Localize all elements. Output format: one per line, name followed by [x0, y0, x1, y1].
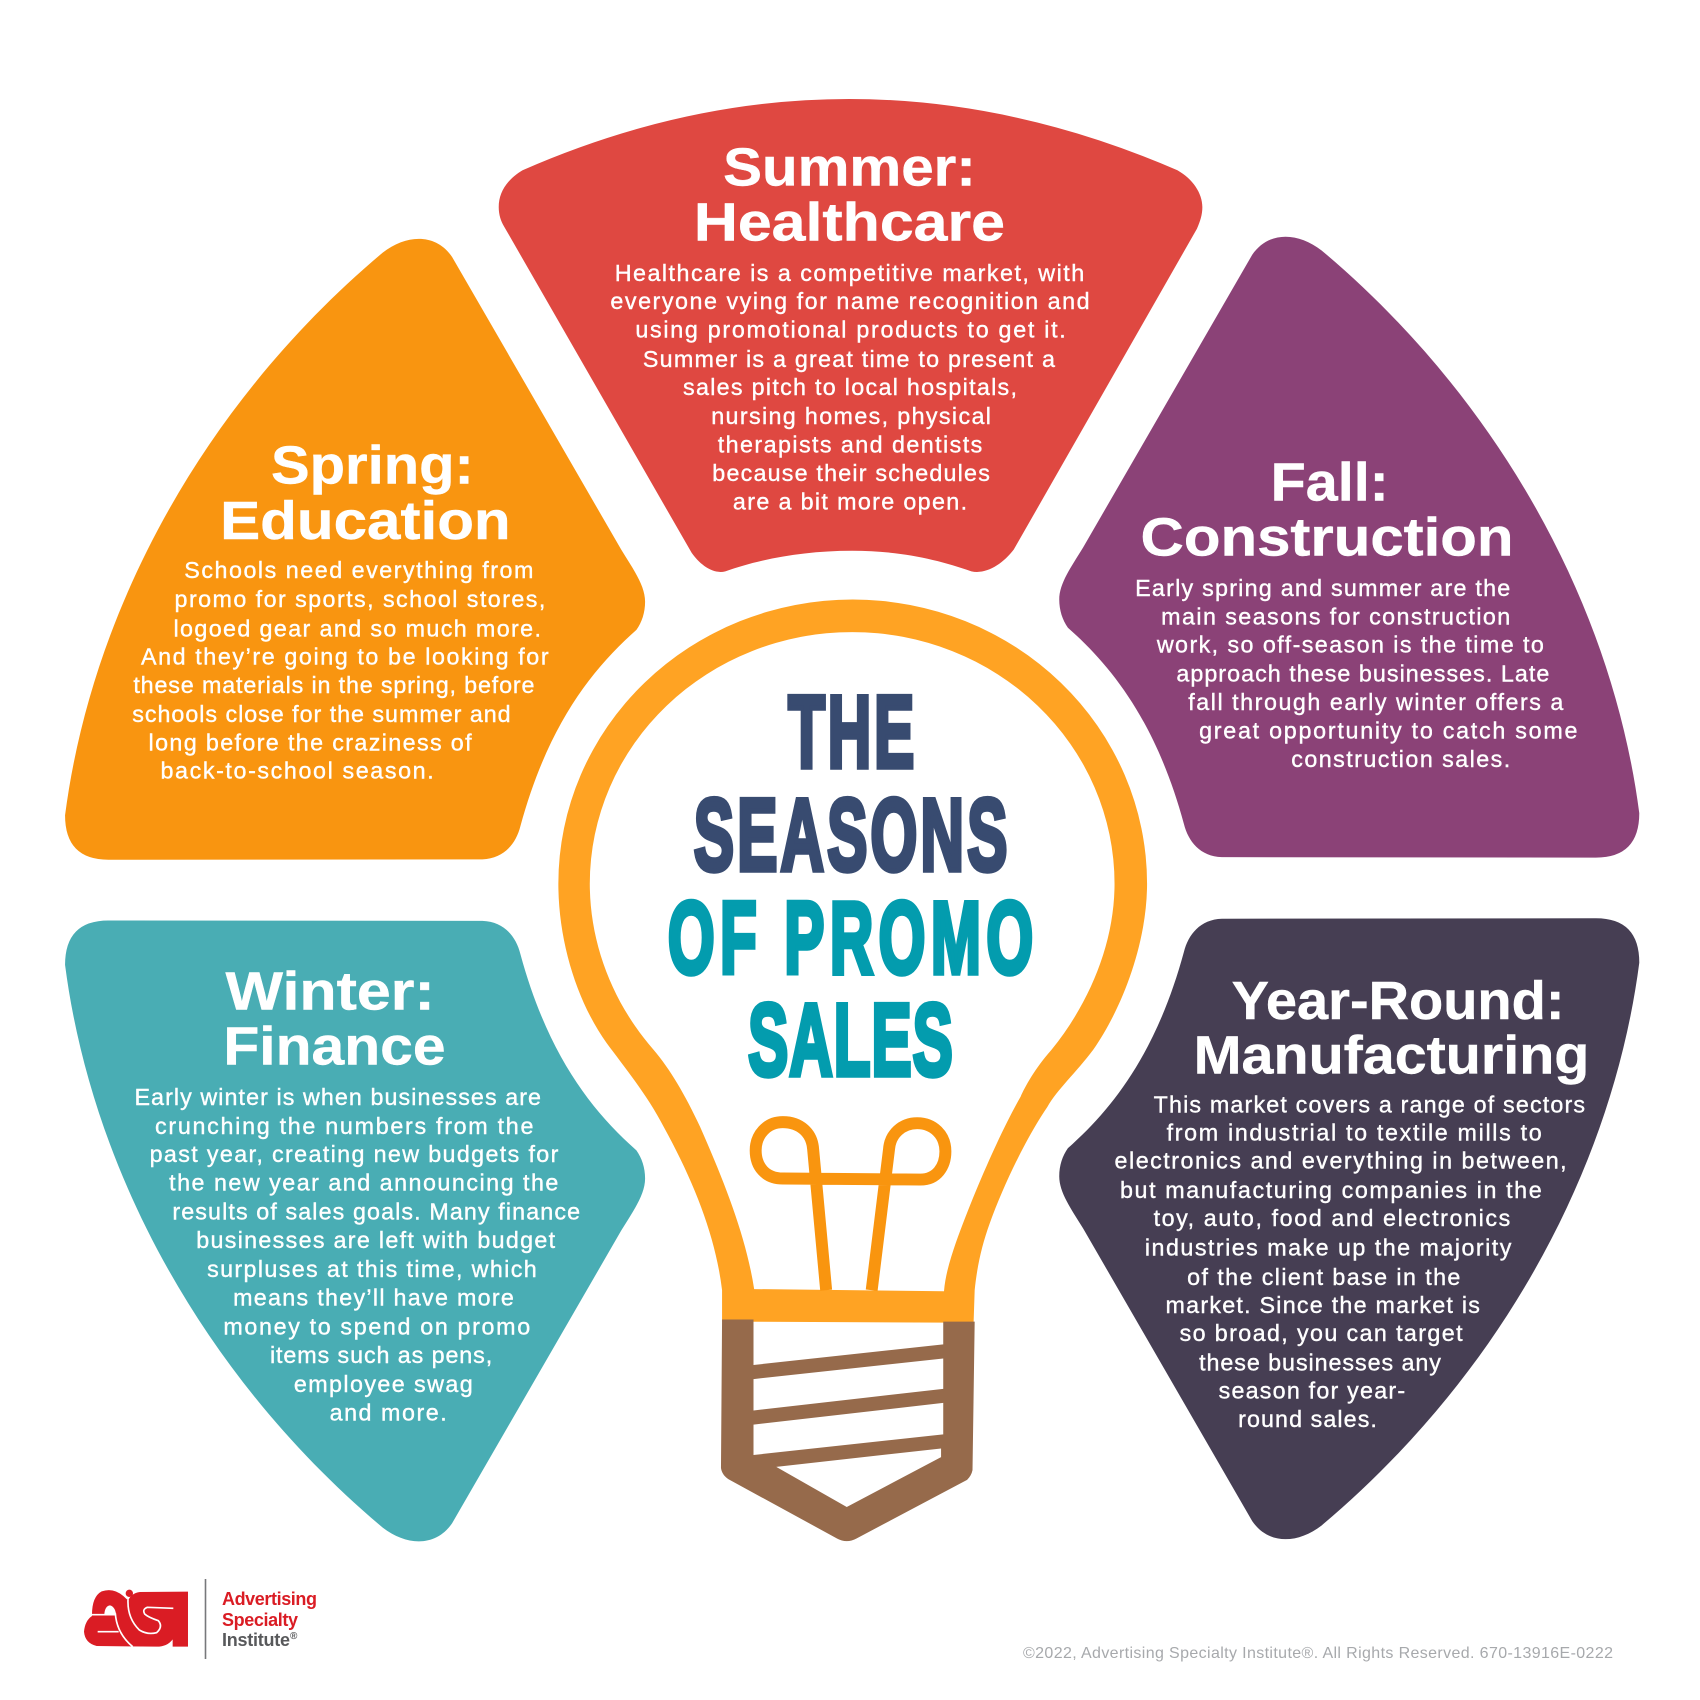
heading: fall construction: Construction — [1141, 508, 1514, 568]
heading: year-round manufacturing: Year-Round: — [1232, 971, 1564, 1031]
body text: winter: means they’ll have more — [233, 1284, 514, 1310]
heading: spring education: Education — [220, 491, 511, 551]
body text: winter: surpluses at this time, which — [207, 1256, 537, 1282]
body text: fall: great opportunity to catch some — [1199, 717, 1577, 743]
panel: summer healthcare — [499, 99, 1202, 572]
heading: winter finance — [223, 961, 446, 1077]
heading: summer healthcare: Summer: — [723, 137, 976, 197]
panel: fall construction — [1059, 237, 1639, 858]
bulb screw base — [721, 1319, 975, 1541]
body text: year-round: but manufacturing companies in the — [1120, 1177, 1542, 1203]
panel shape: spring — [65, 239, 645, 860]
body text: summer: are a bit more open. — [733, 489, 967, 515]
body text: year-round: round sales. — [1238, 1406, 1377, 1432]
body text: year-round — [1115, 1091, 1585, 1432]
body text: fall: construction sales. — [1291, 746, 1510, 772]
bulb glass outline — [558, 600, 1147, 1323]
body text: winter: businesses are left with budget — [196, 1227, 556, 1253]
heading: spring education: Spring: — [271, 436, 474, 496]
title: the seasons of promo sales — [668, 674, 1033, 1097]
body text: spring: Schools need everything from — [184, 557, 533, 583]
body text: year-round: these businesses any — [1199, 1349, 1441, 1375]
body text: year-round: toy, auto, food and electronics — [1154, 1205, 1510, 1231]
body text: spring: logoed gear and so much more. — [173, 615, 541, 641]
body text: fall — [1135, 575, 1577, 772]
body text: summer: Summer is a great time to present a — [643, 346, 1055, 372]
panel shape: fall — [1059, 237, 1639, 858]
logo wordmark: Specialty — [222, 1610, 298, 1630]
lightbulb illustration — [558, 600, 1147, 1541]
body text: spring: promo for sports, school stores, — [175, 586, 545, 612]
body text: spring: long before the craziness of — [149, 729, 472, 755]
panel shape: winter — [65, 920, 645, 1541]
body text: year-round: of the client base in the — [1187, 1264, 1460, 1290]
body text: winter: Early winter is when businesses are — [134, 1084, 541, 1110]
body text: spring: these materials in the spring, before — [133, 672, 535, 698]
body text: fall: approach these businesses. Late — [1176, 660, 1549, 686]
body text: year-round: This market covers a range of sectors — [1154, 1091, 1585, 1117]
heading: fall construction — [1141, 452, 1514, 568]
body text: winter: crunching the numbers from the — [155, 1113, 533, 1139]
body text: spring — [132, 557, 549, 783]
body text: summer: sales pitch to local hospitals, — [683, 374, 1017, 400]
body text: winter: results of sales goals. Many finance — [172, 1199, 580, 1225]
panel shape: summer — [499, 99, 1202, 572]
body text: summer — [610, 260, 1090, 515]
panel shape: year-round — [1059, 918, 1639, 1539]
body text: summer: using promotional products to get it. — [635, 317, 1066, 343]
body text: winter: past year, creating new budgets for — [150, 1141, 559, 1167]
body text: winter: and more. — [330, 1399, 447, 1425]
body text: winter: the new year and announcing the — [169, 1169, 558, 1195]
body text: spring: schools close for the summer and — [132, 701, 511, 727]
body text: fall: main seasons for construction — [1161, 603, 1510, 629]
body text: summer: because their schedules — [712, 460, 990, 486]
heading: summer healthcare: Healthcare — [694, 193, 1005, 253]
filament — [756, 1122, 945, 1290]
body text: winter: employee swag — [294, 1371, 473, 1397]
heading: summer healthcare — [694, 137, 1005, 253]
body text: year-round: market. Since the market is — [1165, 1292, 1480, 1318]
logo divider — [205, 1579, 206, 1659]
body text: summer: Healthcare is a competitive market, with — [615, 260, 1084, 286]
heading: winter finance: Winter: — [226, 961, 435, 1021]
body text: summer: everyone vying for name recognition and — [610, 288, 1090, 314]
logo wordmark: Institute — [222, 1630, 290, 1650]
logo mark: ASI — [84, 1590, 188, 1647]
body text: fall: fall through early winter offers a — [1188, 689, 1563, 715]
panel: winter finance — [65, 920, 645, 1541]
body text: year-round: so broad, you can target — [1180, 1320, 1463, 1346]
body text: year-round: from industrial to textile mills to — [1167, 1120, 1542, 1146]
body text: fall: Early spring and summer are the — [1135, 575, 1510, 601]
body text: year-round: industries make up the majority — [1145, 1234, 1512, 1260]
body text: spring: back-to-school season. — [160, 757, 434, 783]
body text: summer: nursing homes, physical — [711, 403, 991, 429]
title: the seasons of promo sales: OF PROMO — [668, 880, 1033, 995]
logo: advertising specialty institute — [84, 1579, 317, 1659]
heading: year-round manufacturing: Manufacturing — [1194, 1025, 1589, 1085]
body text: spring: And they’re going to be looking for — [141, 644, 549, 670]
heading: year-round manufacturing — [1194, 971, 1589, 1085]
logo wordmark: Advertising — [222, 1589, 317, 1609]
body text: year-round: season for year- — [1219, 1378, 1405, 1404]
logo wordmark: ® — [290, 1631, 298, 1642]
panel: spring education — [65, 239, 645, 860]
body text: summer: therapists and dentists — [718, 432, 982, 458]
copyright footer: ©2022, Advertising Specialty Institute®. All Rights Reserved. 670-13916E-0222 — [1023, 1645, 1613, 1662]
logo wordmark — [222, 1589, 317, 1650]
body text: winter — [134, 1084, 580, 1425]
panel: year-round manufacturing — [1059, 918, 1639, 1539]
body text: winter: items such as pens, — [270, 1342, 492, 1368]
body text: fall: work, so off-season is the time to — [1156, 632, 1544, 658]
body text: winter: money to spend on promo — [223, 1314, 530, 1340]
title: the seasons of promo sales: SALES — [748, 982, 953, 1097]
heading: spring education — [220, 436, 511, 551]
heading: fall construction: Fall: — [1271, 452, 1389, 512]
title: the seasons of promo sales: THE — [788, 674, 914, 789]
title: the seasons of promo sales: SEASONS — [694, 777, 1007, 892]
body text: year-round: electronics and everything in between, — [1115, 1148, 1567, 1174]
heading: winter finance: Finance — [223, 1017, 446, 1077]
